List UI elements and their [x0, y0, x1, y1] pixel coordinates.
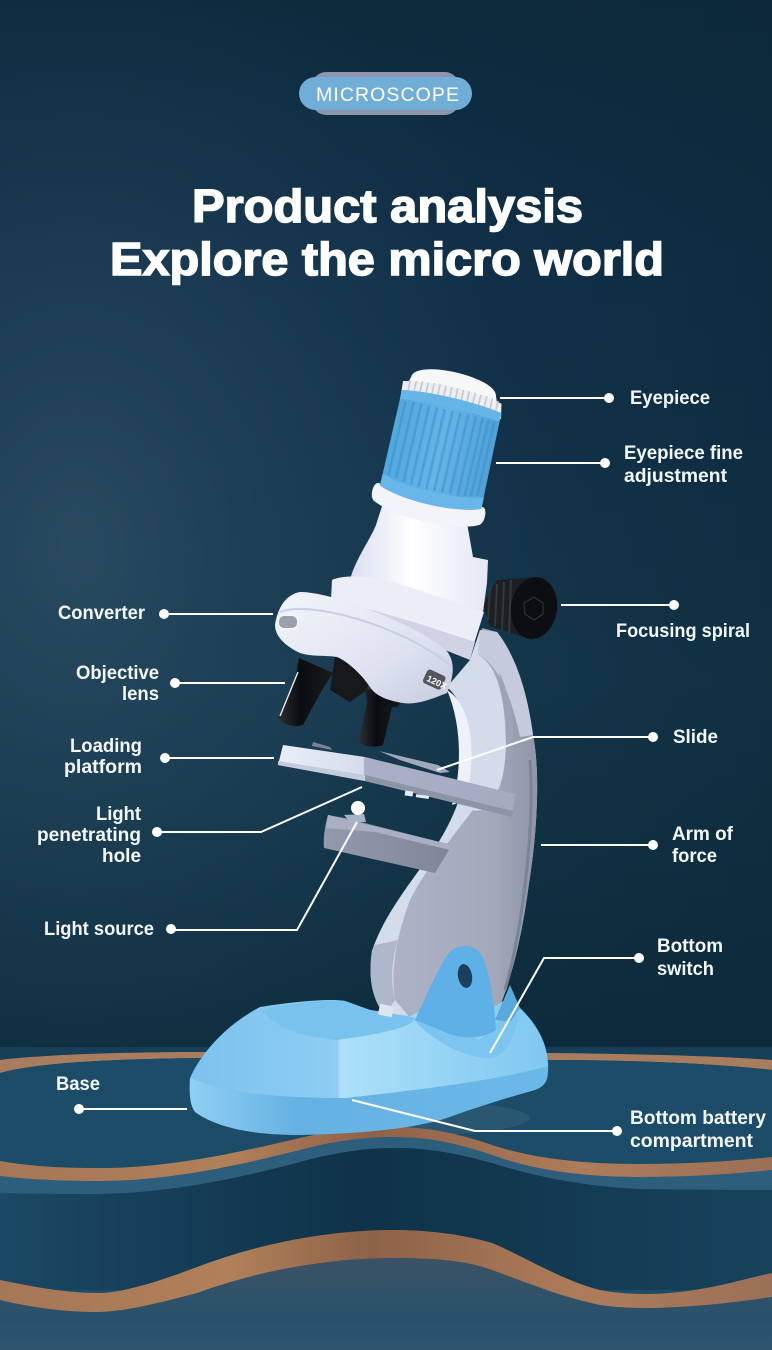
callout: Objective lens	[76, 662, 285, 705]
converter	[275, 592, 453, 703]
platform light lip	[0, 1137, 772, 1194]
platform floor	[0, 1047, 772, 1350]
callout: Eyepiece fine adjustment: Eyepiece fine	[624, 442, 743, 464]
platform inner surface	[0, 1058, 772, 1170]
callout: Arm of force: force	[672, 845, 717, 867]
platform side wall	[0, 1190, 772, 1290]
base	[190, 946, 548, 1135]
light bulb	[351, 801, 365, 815]
objective lenses	[278, 657, 403, 747]
callout: Objective lens: lens	[122, 683, 159, 705]
callout: Objective lens: Objective	[76, 662, 159, 684]
callout: Light penetrating hole: Light	[96, 803, 141, 825]
converter: 120X	[425, 673, 448, 691]
front copper rim	[0, 1127, 772, 1181]
wall upper fill	[0, 1148, 772, 1200]
callout: Base: Base	[56, 1073, 100, 1095]
badge: MICROSCOPE	[299, 72, 472, 115]
callout: Eyepiece: Eyepiece	[630, 387, 710, 409]
callout: Bottom battery compartment: Bottom battery	[630, 1107, 766, 1129]
callout: Bottom battery compartment	[352, 1100, 766, 1152]
platform top copper rim	[0, 1052, 772, 1073]
lower copper band	[0, 1230, 772, 1312]
callout: Light penetrating hole: penetrating	[37, 824, 141, 846]
callout: Converter	[58, 602, 273, 624]
badge: MICROSCOPE: MICROSCOPE	[316, 84, 459, 106]
hinge	[415, 946, 496, 1038]
callout: Bottom switch: Bottom	[657, 935, 723, 957]
microscope illustration	[190, 360, 561, 1135]
callout: Focusing spiral: Focusing spiral	[616, 620, 750, 642]
callout: Bottom switch: switch	[657, 958, 714, 980]
base shadow	[270, 1100, 530, 1136]
callout: Arm of force: Arm of	[672, 823, 733, 845]
arm of force	[370, 628, 537, 1020]
neck	[350, 503, 488, 612]
callout: Eyepiece fine adjustment: adjustment	[624, 465, 727, 487]
callout: Slide: Slide	[673, 726, 718, 748]
title	[110, 180, 664, 285]
callout: Light penetrating hole	[37, 787, 362, 867]
blue knurl	[378, 386, 504, 516]
callout: Loading platform: Loading	[70, 735, 142, 757]
callout: Arm of force	[541, 823, 733, 867]
callout: Eyepiece	[500, 387, 710, 409]
callout: Light source: Light source	[44, 918, 154, 940]
focus knob	[483, 574, 561, 642]
retaining ring	[368, 482, 487, 534]
lamp holder	[324, 801, 452, 873]
callout: Light penetrating hole: hole	[102, 845, 141, 867]
callout: Light source	[44, 822, 357, 940]
display platform	[0, 1047, 772, 1350]
callout: Base	[56, 1073, 187, 1114]
eyepiece cap	[404, 362, 505, 412]
title: Product analysis	[192, 180, 583, 232]
callout: Bottom switch	[490, 935, 723, 1053]
callout: Loading platform: platform	[64, 756, 142, 778]
callout: Loading platform	[64, 735, 274, 778]
ribbed collar	[400, 376, 506, 419]
title: Explore the micro world	[110, 233, 664, 285]
lower floor	[0, 1258, 772, 1350]
callout: Converter: Converter	[58, 602, 145, 624]
callout: Slide	[437, 726, 718, 770]
callout: Eyepiece fine adjustment	[496, 442, 743, 487]
background	[0, 0, 772, 1050]
stage	[278, 742, 515, 817]
callout: Focusing spiral	[561, 600, 750, 642]
turret collar	[325, 577, 484, 660]
eyepiece	[368, 360, 515, 534]
callout: Bottom battery compartment: compartment	[630, 1130, 753, 1152]
